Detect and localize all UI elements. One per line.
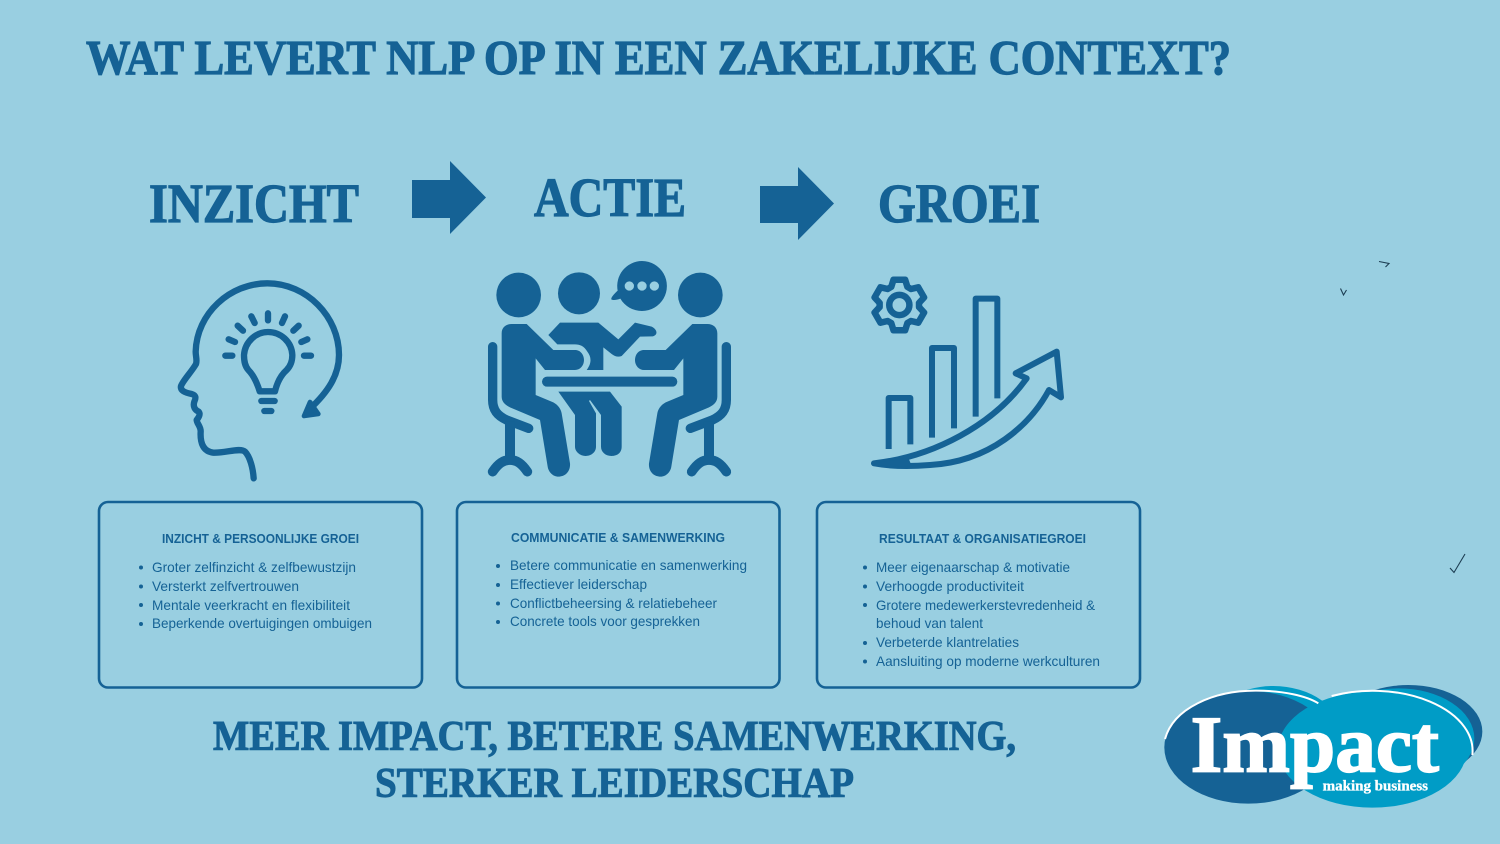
bullet list: Mentale veerkracht en flexibiliteit xyxy=(152,597,350,613)
bullet list: Versterkt zelfvertrouwen xyxy=(152,578,299,594)
light rays xyxy=(225,313,311,356)
icon: people in meeting xyxy=(493,261,726,477)
bullet list: Beperkende overtuigingen ombuigen xyxy=(152,615,372,631)
arrow: inzicht to actie xyxy=(412,161,486,234)
panel: inzicht en persoonlijke groei xyxy=(99,502,422,688)
icon: head with light bulb xyxy=(181,283,339,478)
logo wordmark: Impact xyxy=(1191,702,1439,790)
logo tagline: making business xyxy=(1323,779,1428,795)
head outline with circular arrow xyxy=(181,283,339,478)
bullet list: Conflictbeheersing & relatiebeheer xyxy=(510,595,717,611)
closing statement xyxy=(213,714,1016,807)
left person and chair xyxy=(493,324,584,477)
light ellipse xyxy=(1278,692,1467,808)
closing statement: STERKER LEIDERSCHAP xyxy=(375,761,854,807)
growth arrow xyxy=(874,352,1061,466)
bullet list: Meer eigenaarschap & motivatie xyxy=(876,559,1070,575)
bulb base xyxy=(261,401,275,411)
arrow head xyxy=(304,402,318,416)
panel heading: COMMUNICATIE & SAMENWERKING xyxy=(511,531,725,545)
middle person torso xyxy=(548,323,656,370)
heading: groei: GROEI xyxy=(878,173,1040,234)
bullet list: Verhoogde productiviteit xyxy=(876,578,1024,594)
small stray marks xyxy=(1340,262,1465,572)
bullet list: Effectiever leiderschap xyxy=(510,576,647,592)
bullet list: Concrete tools voor gesprekken xyxy=(510,613,700,629)
arrow: actie to groei xyxy=(760,167,834,240)
right person and chair xyxy=(635,324,726,477)
middle person legs xyxy=(558,392,622,456)
panel heading: RESULTAAT & ORGANISATIEGROEI xyxy=(879,532,1086,546)
logo: impact making business xyxy=(1164,685,1482,808)
title: WAT LEVERT NLP OP IN EEN ZAKELIJKE CONTEXT? xyxy=(86,30,1231,85)
panel: communicatie en samenwerking xyxy=(457,502,780,688)
bullet list: Betere communicatie en samenwerking xyxy=(510,557,747,573)
heading: inzicht: INZICHT xyxy=(149,173,359,234)
bullet list: Groter zelfinzicht & zelfbewustzijn xyxy=(152,559,356,575)
white swooshes xyxy=(1165,691,1318,739)
dark ellipse xyxy=(1164,691,1332,804)
arrow tail wedge xyxy=(874,458,912,466)
bullet list xyxy=(863,559,1100,669)
bulb xyxy=(244,332,292,391)
gear xyxy=(875,280,924,330)
bullet list: Verbeterde klantrelaties xyxy=(876,634,1019,650)
bars xyxy=(889,299,997,449)
heads xyxy=(496,273,541,317)
speech bubble xyxy=(611,261,667,311)
bullet list xyxy=(496,557,747,629)
bullet list: Aansluiting op moderne werkculturen xyxy=(876,653,1100,669)
bullet list: Grotere medewerkerstevredenheid & xyxy=(876,597,1096,613)
panel heading: INZICHT & PERSOONLIJKE GROEI xyxy=(162,532,359,546)
table xyxy=(542,377,677,387)
back ellipses xyxy=(1334,685,1482,778)
heading: actie: ACTIE xyxy=(534,167,686,228)
panel: resultaat en organisatiegroei xyxy=(817,502,1140,688)
closing statement: MEER IMPACT, BETERE SAMENWERKING, xyxy=(213,714,1016,760)
icon: growth chart with gear xyxy=(874,280,1061,466)
bullet list: behoud van talent xyxy=(876,615,983,631)
bullet list xyxy=(139,559,372,631)
